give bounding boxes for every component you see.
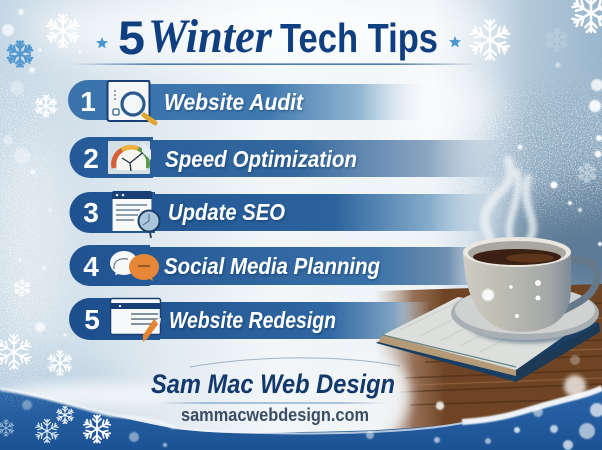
label: update seo: Update SEO (168, 199, 285, 225)
tip 2: speed optimization (70, 137, 520, 178)
footer divider (160, 402, 385, 404)
title star: right (449, 36, 461, 47)
label: social media planning: Social Media Planning (164, 253, 380, 279)
number 4: 4 (83, 251, 99, 282)
label: speed optimization: Speed Optimization (165, 146, 357, 172)
bottom snowy wave (0, 388, 602, 450)
icon: browser with pencil (110, 298, 161, 342)
steam (485, 160, 533, 238)
tip 5: website redesign (69, 298, 430, 342)
coffee (473, 249, 561, 265)
footer: company name (151, 358, 400, 399)
title: Winter (148, 10, 273, 63)
footer: website url: sammacwebdesign.com (181, 405, 369, 425)
notebook (376, 296, 600, 382)
title underline (72, 64, 477, 65)
saucer (451, 286, 599, 343)
tip 3: update seo (69, 191, 510, 238)
snow on cup (482, 280, 541, 318)
number 2: 2 (83, 143, 99, 174)
title star: left (96, 37, 108, 48)
title (118, 10, 438, 64)
coffee cup and saucer (451, 237, 599, 343)
icon: document with clock (112, 191, 160, 238)
rim (463, 237, 571, 267)
label: website redesign: Website Redesign (169, 307, 336, 333)
tip 4: social media planning (69, 245, 490, 286)
handle (560, 260, 597, 312)
number 3: 3 (83, 197, 99, 228)
icon: magnifying glass audit (108, 81, 155, 123)
cup body (463, 252, 571, 332)
label: website audit: Website Audit (164, 89, 304, 115)
table snow patches (436, 355, 586, 410)
tip 1: website audit (68, 80, 425, 123)
icon: chat bubbles (110, 251, 159, 281)
number 5: 5 (84, 304, 100, 335)
number 1: 1 (80, 86, 96, 117)
title: Tech Tips (280, 15, 438, 61)
wooden table (334, 284, 602, 440)
footer: company name: Sam Mac Web Design (151, 369, 395, 399)
title: 5 (118, 11, 145, 64)
icon: speed gauge (108, 141, 151, 174)
